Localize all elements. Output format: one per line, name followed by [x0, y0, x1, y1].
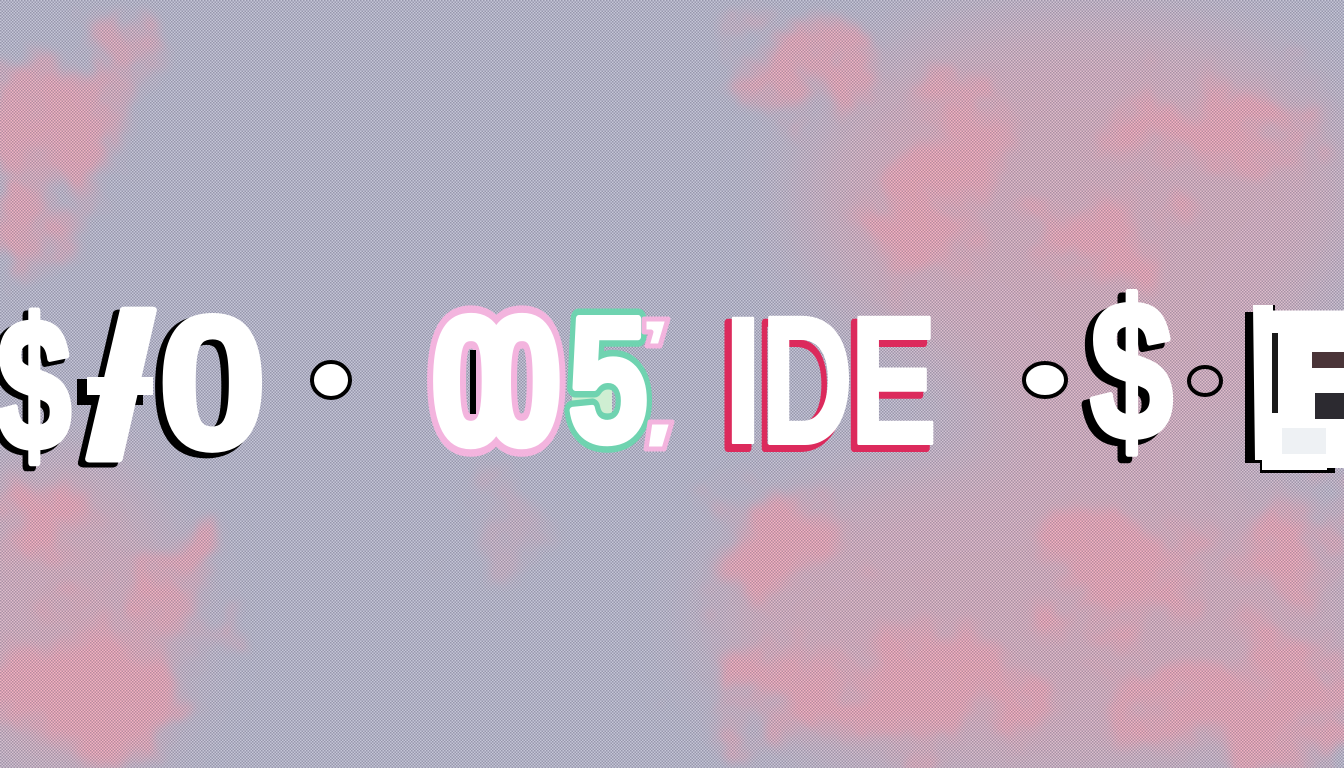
glyph: slash with cross bar	[77, 275, 155, 502]
letter: I: I	[723, 278, 763, 482]
glyph: dollar sign: $	[0, 282, 71, 489]
text fragment: dollar, slash, zero	[0, 275, 267, 502]
glyph: slash with cross bar: /	[81, 279, 149, 502]
letter: D: D	[756, 283, 848, 487]
letter: E: E	[850, 278, 937, 482]
text fragment: pink double zero: 0	[431, 281, 511, 482]
letter: I: I	[718, 283, 758, 487]
letter: D: D	[761, 278, 853, 482]
letter: E: E	[845, 283, 932, 487]
glyph: second dollar sign: $	[1090, 260, 1173, 481]
text fragment: green five: 5	[568, 280, 648, 479]
glyph: zero: 0	[158, 278, 267, 489]
glyph: zero: 0	[152, 282, 261, 493]
glyph: second dollar sign: $	[1083, 265, 1166, 486]
separator ring: hollow	[1189, 367, 1221, 395]
punctuation: pink apostrophe and point	[644, 319, 672, 449]
text fragment: green five: 5	[568, 280, 648, 479]
glyph: slash with cross bar: /	[87, 275, 155, 498]
text fragment: pink double zero: 0	[482, 281, 562, 482]
separator dot: left	[312, 362, 350, 398]
text fragment: IDE in crimson outline	[718, 278, 937, 487]
text fragment: pink double zero: 0	[431, 281, 511, 482]
text fragment: pink double zero: 0	[482, 281, 562, 482]
separator dot: centre right	[1024, 363, 1066, 397]
